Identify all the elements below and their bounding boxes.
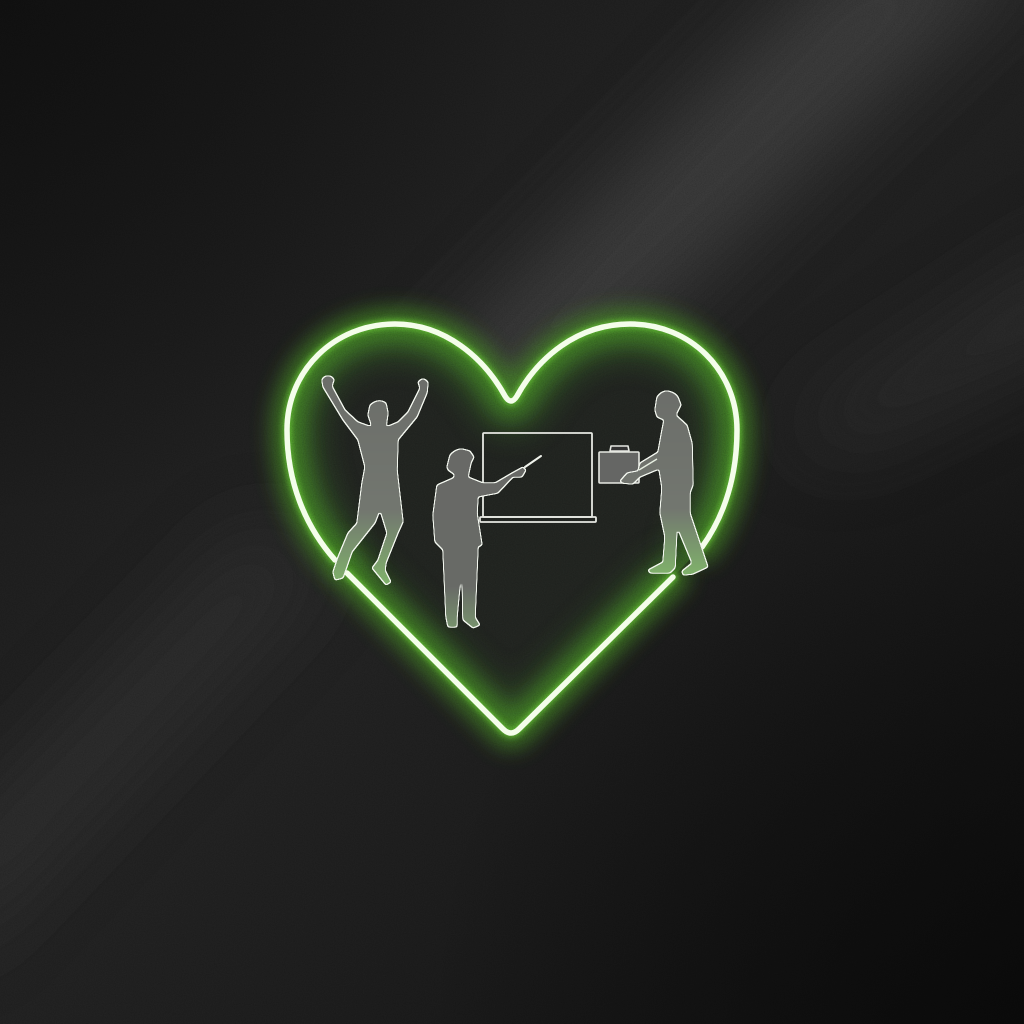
neon core line: [287, 324, 737, 733]
neon heart outline: [287, 324, 737, 735]
pointer: [525, 456, 541, 467]
figure: teacher with pointer: [433, 433, 596, 628]
forearm line: [639, 459, 657, 470]
businessman silhouette: [620, 391, 708, 575]
figure: person handing briefcase: [599, 391, 708, 575]
briefcase: [599, 446, 639, 483]
whiteboard: [480, 433, 596, 522]
figure: jumping person: [322, 376, 428, 585]
teacher silhouette: [433, 449, 526, 628]
